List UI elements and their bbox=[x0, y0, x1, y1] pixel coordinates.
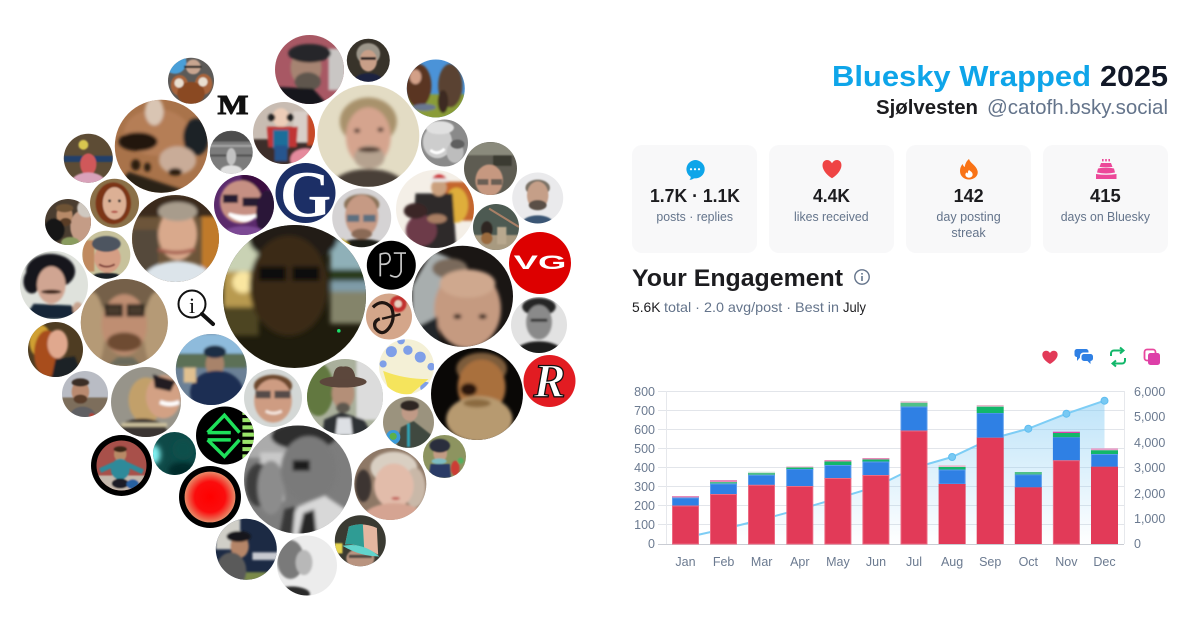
panel: likes received: likes received bbox=[794, 210, 869, 224]
bar: September bbox=[977, 405, 1004, 544]
avatar: black and white stern man bbox=[511, 297, 567, 353]
bar: May bbox=[824, 460, 851, 544]
bar: February bbox=[710, 480, 737, 544]
avatar: ice cream drawing bbox=[379, 339, 434, 394]
logo: PJ monogram bbox=[366, 240, 416, 290]
title: Bluesky Wrapped bbox=[832, 61, 1091, 93]
avatar: woman with red hair bbox=[90, 178, 139, 228]
icon: birthday cake bbox=[1096, 159, 1116, 179]
avatar: redheaded woman bbox=[25, 319, 86, 380]
profile name and handle: @catofh.bsky.social bbox=[987, 97, 1168, 119]
avatar: man with black curly hair and moustache bbox=[20, 251, 88, 319]
month labels: Mar bbox=[751, 555, 772, 569]
right axis labels bbox=[1134, 385, 1165, 551]
avatar: blonde long-haired man with glasses bbox=[80, 279, 168, 366]
profile name and handle bbox=[876, 97, 1168, 119]
avatar: black and white couple bbox=[421, 120, 468, 166]
avatar: man with dark-rimmed glasses bbox=[241, 366, 305, 430]
panel: posting streak: 142 bbox=[954, 186, 984, 206]
month labels: Sep bbox=[979, 555, 1001, 569]
month labels: Feb bbox=[713, 555, 734, 569]
month labels: Nov bbox=[1055, 555, 1078, 569]
icon: flame bbox=[960, 159, 978, 180]
month labels: May bbox=[826, 555, 850, 569]
avatar: man in brown hat bbox=[307, 359, 383, 435]
avatar: sunset selfie man with cap, largest bubble bbox=[223, 225, 366, 368]
panel: posting streak: streak bbox=[951, 226, 986, 240]
avatar: man with glasses, top of head bbox=[464, 142, 517, 195]
avatar: grey-bearded man bbox=[512, 172, 563, 224]
avatar: Santa-hat illustration bbox=[396, 170, 474, 248]
avatar bubble cluster bbox=[17, 32, 578, 602]
avatar: purple-toned man with glasses bbox=[214, 175, 274, 235]
right axis labels: 2,000 bbox=[1134, 487, 1165, 501]
avatar: bearded man on mountain bbox=[60, 369, 110, 425]
panel: posts and replies bbox=[632, 145, 757, 253]
month labels: Aug bbox=[941, 555, 963, 569]
panel: posts and replies: 1.7K · 1.1K bbox=[650, 186, 740, 206]
icon: legend quotes bbox=[1144, 350, 1160, 365]
month labels: Apr bbox=[790, 555, 810, 569]
right axis labels: 1,000 bbox=[1134, 512, 1165, 526]
icon: legend heart bbox=[1042, 351, 1058, 364]
month labels: Oct bbox=[1019, 555, 1039, 569]
chart legend bbox=[1042, 348, 1160, 366]
avatar: person in teal patterned cap bbox=[334, 515, 386, 566]
avatar: black and white profile of woman bbox=[274, 532, 340, 602]
avatar: baby with headphones bbox=[253, 102, 315, 164]
left axis labels: 100 bbox=[634, 518, 655, 532]
avatar: blonde woman with sunglasses bbox=[108, 364, 184, 445]
avatar: balding man with blue glasses bbox=[332, 188, 392, 248]
right axis labels: 0 bbox=[1134, 537, 1141, 551]
icon: chat bubble bbox=[686, 160, 705, 180]
bar: April bbox=[786, 466, 813, 544]
logo: M: M bbox=[218, 90, 248, 120]
chart: monthly engagement stacked bars with cumulative line bbox=[634, 385, 1165, 569]
avatar: man with red face bbox=[64, 134, 113, 183]
left axis labels: 700 bbox=[634, 404, 655, 418]
bar: December bbox=[1091, 448, 1118, 544]
avatar: dog in the forest bbox=[473, 204, 519, 250]
avatar: person with knit hat bbox=[423, 435, 466, 478]
panel: days on Bluesky bbox=[1043, 145, 1168, 253]
logo: R: R bbox=[532, 355, 566, 408]
icon: magnifier with i bbox=[178, 290, 213, 324]
icon: info bbox=[855, 270, 869, 284]
avatar: bearded man with tattoo bbox=[45, 199, 91, 245]
avatar: blonde woman close-up bbox=[354, 448, 426, 520]
avatar: man with spaniels bbox=[168, 58, 214, 104]
left axis labels: 300 bbox=[634, 480, 655, 494]
logo: Guardian G: G bbox=[280, 158, 331, 231]
left axis labels: 600 bbox=[634, 423, 655, 437]
bar: November bbox=[1053, 432, 1080, 544]
avatar: main profile, man with moustache bbox=[317, 84, 420, 187]
month labels: Jul bbox=[906, 555, 922, 569]
bar: June bbox=[862, 458, 889, 544]
right axis labels: 4,000 bbox=[1134, 436, 1165, 450]
avatar: dog face close-up bbox=[114, 100, 208, 193]
bar: August bbox=[939, 465, 966, 544]
panel: likes received: 4.4K bbox=[813, 186, 850, 206]
bar: January bbox=[672, 496, 699, 544]
panel: posting streak bbox=[906, 145, 1031, 253]
icon: legend replies bbox=[1074, 349, 1093, 364]
left axis labels: 500 bbox=[634, 442, 655, 456]
logo: VG bbox=[509, 232, 571, 294]
bar: October bbox=[1015, 472, 1042, 544]
left axis labels: 800 bbox=[634, 385, 655, 399]
panel: posts and replies: posts · replies bbox=[656, 210, 733, 224]
icon: heart bbox=[823, 160, 841, 178]
avatar: doll in checked shirt bbox=[88, 432, 155, 499]
panel: days on Bluesky: 415 bbox=[1090, 186, 1121, 206]
left axis labels bbox=[634, 385, 655, 551]
avatar: grey photo bbox=[210, 130, 253, 174]
avatar: grey-haired person with glasses bbox=[346, 38, 390, 82]
right axis labels: 3,000 bbox=[1134, 461, 1165, 475]
cumulative line and markers bbox=[686, 397, 1108, 538]
left axis labels: 200 bbox=[634, 499, 655, 513]
logo: R bbox=[524, 355, 576, 407]
avatar: smiling man, white shirt bbox=[132, 195, 219, 282]
avatar: woman with horse bbox=[406, 60, 465, 118]
avatar: man in cap bbox=[82, 230, 130, 279]
month labels: Jan bbox=[675, 555, 696, 569]
horizontal grid lines bbox=[658, 391, 1124, 544]
engagement summary text: July bbox=[843, 299, 866, 315]
left axis labels: 0 bbox=[648, 537, 655, 551]
icon: legend reposts bbox=[1111, 348, 1125, 366]
title: 2025 bbox=[1100, 61, 1168, 93]
left axis labels: 400 bbox=[634, 461, 655, 475]
avatar: woman with braids and globe bbox=[383, 396, 434, 448]
avatar: man in dark cap, red background bbox=[275, 35, 344, 104]
panel: likes received bbox=[769, 145, 894, 253]
engagement summary text: total · 2.0 avg/post · Best in bbox=[664, 299, 839, 315]
avatar: red glowing dot bbox=[176, 463, 244, 531]
avatar: man with cap in front of sign bbox=[213, 516, 280, 589]
logo: green arrows on black bbox=[193, 404, 257, 467]
avatar: old man with white beard bbox=[431, 348, 523, 440]
month labels: Dec bbox=[1093, 555, 1116, 569]
axis baseline bbox=[658, 544, 1124, 546]
right axis labels: 5,000 bbox=[1134, 410, 1165, 424]
engagement summary text: 5.6K bbox=[632, 299, 661, 315]
heading: Your Engagement: Your Engagement bbox=[632, 265, 843, 292]
right axis labels: 6,000 bbox=[1134, 385, 1165, 399]
avatar: dark teal image bbox=[148, 430, 198, 479]
avatar: Moomin tattoo bbox=[366, 294, 412, 340]
avatar: balding man with fluffy hair bbox=[412, 246, 513, 347]
month labels bbox=[675, 555, 1116, 569]
avatar: black and white man in suit bbox=[244, 426, 352, 534]
stacked bars bbox=[672, 401, 1118, 544]
icon: magnifier with i: i bbox=[189, 293, 195, 318]
bar: March bbox=[748, 472, 775, 544]
panel: posting streak: day posting bbox=[936, 210, 1001, 224]
avatar: man with beer at festival bbox=[172, 330, 250, 415]
panel: days on Bluesky: days on Bluesky bbox=[1061, 210, 1151, 224]
month labels: Jun bbox=[866, 555, 886, 569]
bar: July bbox=[900, 401, 928, 544]
cumulative area bbox=[686, 401, 1104, 544]
profile name and handle: Sjølvesten bbox=[876, 97, 978, 119]
